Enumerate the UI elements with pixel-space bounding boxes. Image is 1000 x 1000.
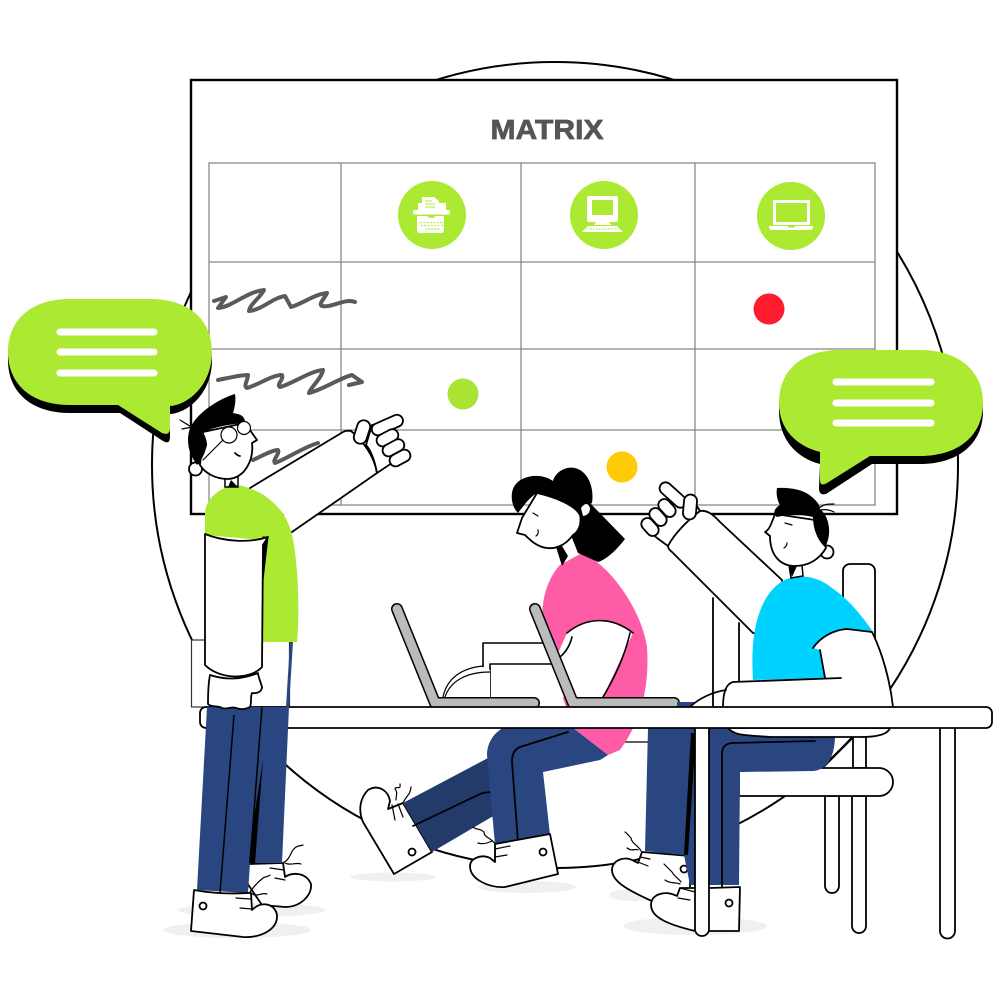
standing man back shoe bbox=[245, 845, 311, 907]
scribble row 3 bbox=[253, 443, 318, 463]
marker: red dot bbox=[754, 294, 784, 324]
scribble row 2 bbox=[218, 370, 362, 393]
standing man legs bbox=[197, 642, 293, 893]
icon: laptop bbox=[757, 182, 825, 250]
woman head bbox=[512, 468, 592, 548]
man raised hand bbox=[639, 480, 700, 546]
marker: green dot bbox=[448, 378, 478, 410]
laptop: right bbox=[535, 609, 674, 703]
standing man head bbox=[180, 394, 257, 487]
laptop: left bbox=[397, 609, 534, 703]
title: MATRIX bbox=[490, 114, 604, 145]
woman back leg bbox=[403, 758, 495, 852]
icon: desktop computer bbox=[570, 181, 638, 249]
woman forearm and hand bbox=[443, 643, 570, 697]
marker: yellow dot bbox=[606, 452, 638, 482]
man back shoe bbox=[612, 832, 690, 905]
speech bubble: left bbox=[8, 299, 212, 442]
speech bubble: right bbox=[779, 350, 983, 494]
background circle bbox=[152, 62, 958, 868]
man torso bbox=[752, 576, 873, 680]
person: man seated bbox=[612, 480, 893, 931]
man raised arm bbox=[668, 511, 790, 640]
woman torso bbox=[542, 553, 647, 755]
ground shadows bbox=[163, 872, 767, 938]
icon: typewriter bbox=[398, 181, 466, 249]
scribble row 1 bbox=[214, 290, 355, 311]
man front shoe bbox=[651, 864, 740, 931]
grid bbox=[209, 163, 875, 505]
standing man raised hand bbox=[352, 413, 413, 473]
man arm and forearm bbox=[690, 629, 893, 737]
man head bbox=[765, 488, 834, 578]
woman arm bbox=[555, 621, 633, 697]
standing man raised arm bbox=[250, 431, 377, 532]
standing man front shoe bbox=[191, 875, 277, 937]
woman front shoe bbox=[470, 827, 558, 887]
person: man standing bbox=[180, 394, 413, 937]
table bbox=[200, 707, 992, 939]
panel behind standing person bbox=[192, 640, 290, 707]
person: woman seated bbox=[360, 468, 647, 887]
chair: back and seat bbox=[620, 564, 893, 933]
standing man lowered arm bbox=[205, 534, 268, 709]
matrix board bbox=[191, 80, 897, 514]
standing man torso bbox=[205, 485, 298, 642]
woman front leg bbox=[487, 728, 608, 845]
man legs bbox=[645, 702, 835, 887]
woman neck bbox=[556, 538, 576, 566]
woman hair back bbox=[568, 503, 625, 562]
woman back shoe bbox=[360, 784, 432, 874]
